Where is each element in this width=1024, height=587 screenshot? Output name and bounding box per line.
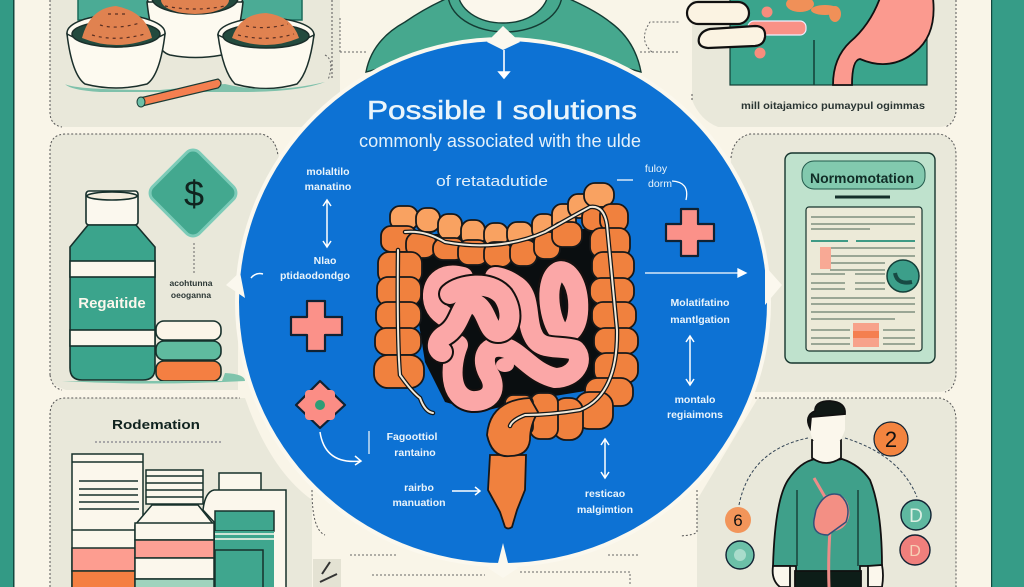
panel caption: mill oitajamico pumaypul ogimmas [741, 100, 925, 112]
label: bottom right: malgimtion [577, 504, 633, 516]
arrow: bottom centre [452, 487, 480, 495]
icon: seal [887, 260, 919, 292]
man at top [366, 0, 641, 72]
arrow: middle left curve [251, 274, 263, 278]
badge: letter D [901, 500, 931, 530]
label: bottom right: resticao [585, 488, 625, 500]
label: middle right: mantlgation [670, 314, 730, 326]
icon: medicine bottle: Regaitide [78, 295, 146, 312]
dark abdominal background [405, 228, 622, 412]
icon: dollar diamond: $ [184, 173, 204, 214]
icon: bowls of food [67, 0, 314, 88]
badge: number 2: 2 [885, 427, 897, 452]
icon: person [773, 401, 883, 587]
label: bottom centre left: manuation [392, 497, 446, 509]
arrow: top left vertical [323, 200, 331, 247]
icon: small corner symbol [313, 559, 341, 587]
main blue circle [235, 37, 771, 567]
panel: bottom right person [680, 398, 956, 587]
dashed orbit arrows [739, 438, 917, 505]
illustration: teal stomach card [730, 0, 927, 85]
plus icon right [666, 209, 714, 256]
icon: organ on person [814, 478, 848, 587]
label: lower centre left: Fagoottiol [387, 431, 437, 443]
label: middle left: ptidaodondgo [280, 270, 350, 282]
arrow: bottom right vertical [601, 439, 609, 478]
panel: middle right document [731, 134, 956, 392]
intestine illustration [374, 183, 638, 528]
label: top right: fuloy [645, 163, 668, 175]
panel: top left foods [50, 0, 340, 127]
plus icon left [291, 301, 342, 351]
arrow: top right curve [617, 180, 687, 200]
icon: stomach [833, 0, 934, 85]
icon: pill bar [748, 21, 806, 35]
connector dotted lines [325, 18, 680, 585]
shadow under bowls [65, 82, 325, 92]
left border stripe [0, 0, 14, 587]
colon centre line [398, 207, 617, 426]
right border stripe [991, 0, 1024, 587]
icon: document card [785, 153, 935, 363]
colon segments [374, 183, 638, 528]
white connector diamonds [226, 26, 782, 578]
icon: product bottle [135, 470, 214, 587]
icon: dollar diamond [146, 146, 240, 240]
badge: number 2 [874, 422, 908, 456]
icon: product jug [203, 473, 286, 587]
label: top left: molaltilo [306, 166, 350, 178]
icon: medicine bottle [70, 191, 155, 380]
icon: stacked tablets [156, 321, 221, 381]
small panel caption: acohtunna [170, 278, 213, 288]
line: lower left vertical [368, 431, 370, 454]
label: middle right: Molatifatino [671, 297, 729, 309]
panel: top right stomach [687, 0, 956, 127]
label: top left: manatino [305, 181, 351, 193]
food texture [92, 6, 294, 38]
document inner sheet [806, 207, 922, 351]
label: lower centre left: rantaino [394, 447, 436, 459]
flower icon left [296, 381, 345, 428]
label: top right: dorm [648, 178, 672, 190]
panel: left bottle [50, 134, 279, 390]
icon: flowers [754, 0, 841, 58]
panel heading: Rodemation [112, 417, 200, 432]
label: lower right: montalo [675, 394, 715, 406]
document heading pill: Normomotation [810, 170, 914, 186]
arrow: right vertical [686, 336, 694, 385]
badge: number 6: 6 [733, 511, 743, 530]
label: bottom centre left: rairbo [404, 482, 434, 494]
badge: teal lower left [726, 541, 754, 569]
badge: pink lower right: D [909, 543, 921, 560]
icon: carrot stick [137, 79, 221, 107]
down arrow [499, 50, 509, 78]
icon: product box [72, 454, 143, 587]
title: Possible I solutions [367, 95, 637, 125]
label: middle left: Nlao [314, 255, 336, 267]
badge: pink lower right [900, 535, 930, 565]
small panel caption: oeoganna [171, 290, 211, 300]
small intestine [433, 271, 579, 401]
badge: number 6 [725, 507, 751, 533]
arrow: right horizontal [645, 269, 746, 277]
subtitle: commonly associated with the ulde [359, 131, 641, 151]
panel: bottom left products [50, 398, 325, 587]
blue circle labels and arrows [251, 163, 746, 516]
subtitle second line: of retatadutide [436, 173, 548, 190]
document heading pill [802, 161, 925, 189]
arrow: lower left curve [320, 432, 361, 465]
label: lower right: regiaimons [667, 409, 723, 421]
icon: fingers [687, 2, 765, 48]
badge: letter D: D [909, 506, 923, 527]
